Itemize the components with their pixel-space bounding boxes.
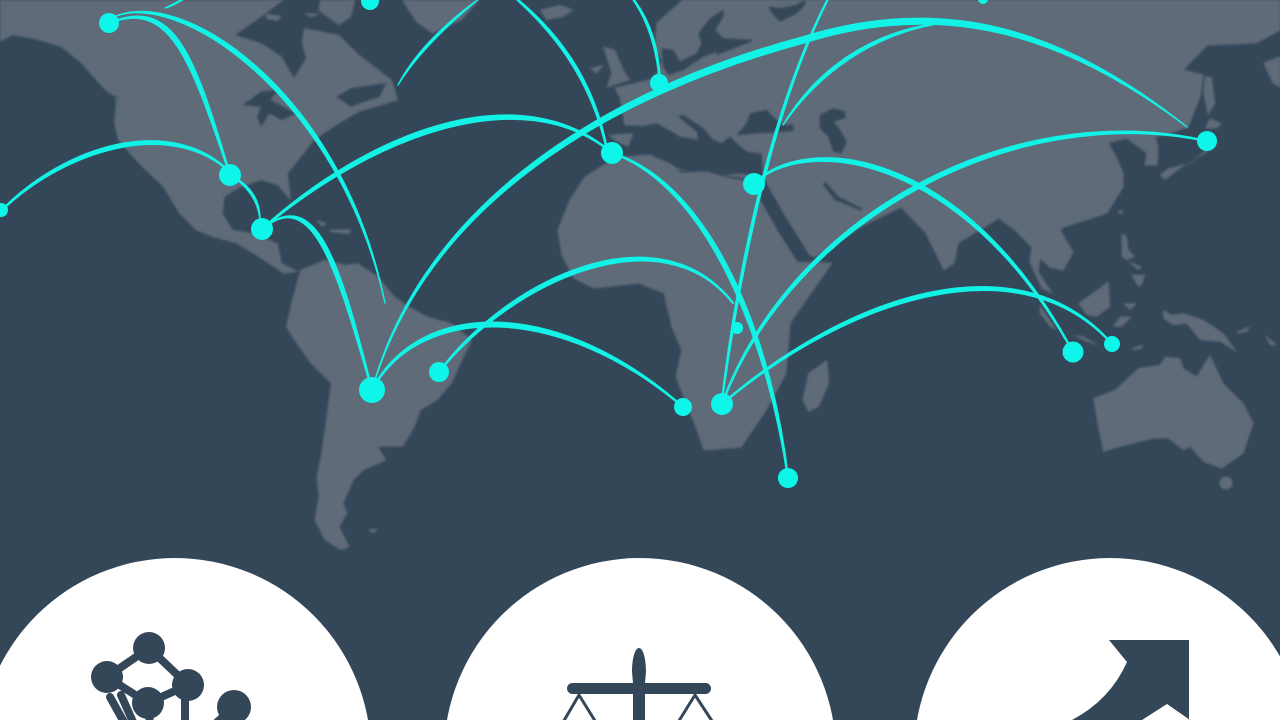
node	[99, 13, 119, 33]
panel: middle white circle	[444, 558, 836, 720]
panel: left white circle	[0, 558, 371, 720]
land: Japan, Sakhalin and Taiwan	[1117, 77, 1222, 215]
node	[1197, 131, 1217, 151]
arc: top edge stub	[165, 0, 190, 8]
seas: Baltic, White Sea, Mediterranean, Black Sea, Caspian and Persian Gulf	[630, 0, 862, 211]
icon: molecule	[91, 632, 251, 720]
icon: growth arrow	[1072, 640, 1190, 720]
panel: right white circle	[914, 558, 1280, 720]
connection arcs	[2, 0, 1207, 478]
node	[601, 142, 623, 164]
world map landmasses	[0, 0, 1280, 550]
connection nodes	[0, 0, 1217, 488]
node	[1062, 342, 1084, 362]
arc: Mexico to Central America	[230, 175, 260, 222]
arc: Central America to West Africa	[262, 115, 612, 229]
icon: balance scale	[562, 648, 714, 720]
arc: West Africa to Indian Ocean	[612, 153, 788, 478]
node	[359, 377, 385, 403]
land: Iceland, Britain and Ireland	[540, 5, 633, 147]
arc: Southern Africa to Indonesia	[722, 287, 1112, 404]
land: Canadian islands and Greenland	[265, 0, 480, 234]
arc: Labrador to Greenland	[398, 0, 480, 85]
land: North America	[0, 0, 398, 273]
node	[731, 322, 743, 334]
land: South America	[286, 260, 472, 550]
node	[219, 164, 241, 186]
inland waters: Great Lakes, St Lawrence and Gulf of California	[102, 83, 386, 207]
node	[0, 203, 8, 217]
node	[711, 393, 733, 415]
land: Southeast Asia islands and Pacific	[1040, 233, 1277, 352]
node	[674, 398, 692, 416]
arc: Northern Europe to top edge	[630, 0, 660, 83]
arc: Brazil to East Africa	[439, 258, 733, 372]
arc: South America to Japan	[372, 18, 1187, 390]
arc: Central America to South America	[262, 216, 372, 390]
arc: Atlantic north to West Africa	[512, 0, 608, 155]
node	[429, 362, 449, 382]
land: Madagascar	[802, 360, 829, 412]
arc: Southern Africa to Japan	[722, 132, 1207, 404]
land: Australia	[1093, 355, 1253, 468]
land: Africa	[558, 155, 832, 450]
land: Eurasia	[615, 0, 1280, 293]
node	[1104, 336, 1120, 352]
node	[361, 0, 379, 10]
arc: Canada to Mexico	[109, 17, 230, 175]
arc: Middle East to Indonesia	[754, 158, 1073, 352]
arc: Middle East branch	[783, 22, 950, 125]
arc: Canada to South America	[112, 11, 385, 303]
arc: South America to South Africa	[372, 323, 683, 407]
node	[778, 468, 798, 488]
node	[251, 218, 273, 240]
node	[743, 173, 765, 195]
node	[650, 74, 668, 92]
arc: Southern Africa to Russia	[722, 0, 830, 400]
land: Tasmania	[1220, 477, 1232, 489]
node	[978, 0, 988, 4]
arc: Pacific to Mexico	[2, 141, 230, 210]
